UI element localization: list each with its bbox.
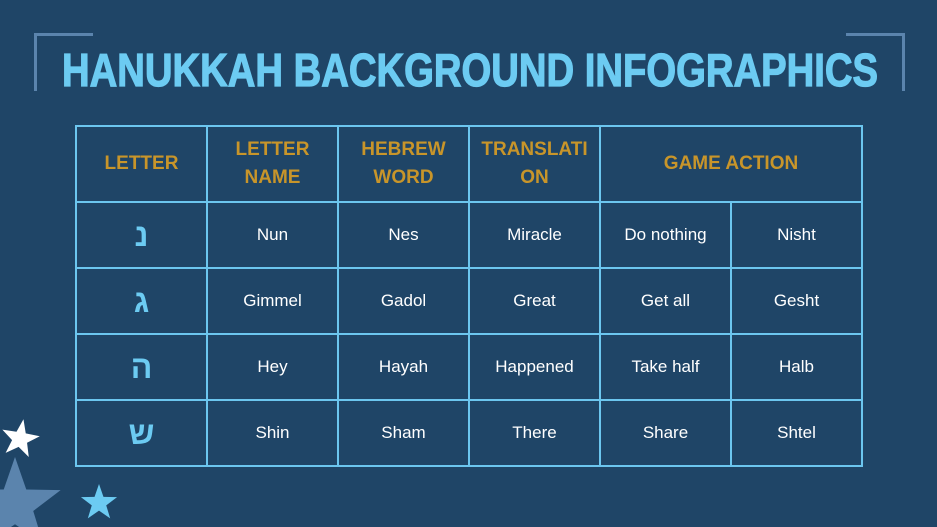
icon: big star: [0, 457, 61, 527]
table: LETTER: [236, 139, 309, 160]
table: Nun: [257, 225, 288, 244]
table: LETTER: [105, 153, 178, 174]
title bracket left: [34, 33, 93, 91]
table: Share: [643, 423, 688, 442]
table: ג: [134, 282, 149, 318]
table: Nes: [388, 225, 419, 244]
table: Miracle: [507, 225, 562, 244]
table: Gadol: [381, 291, 426, 310]
table: GAME ACTION: [664, 153, 798, 174]
title bracket right: [846, 33, 905, 91]
table: Shtel: [777, 423, 816, 442]
table: There: [512, 423, 557, 442]
table: NAME: [245, 167, 300, 188]
table: [75, 125, 863, 467]
table: Hayah: [379, 357, 428, 376]
table: TRANSLATI: [481, 139, 588, 160]
table: Do nothing: [624, 225, 707, 244]
table: Take half: [631, 357, 700, 376]
table: Hey: [257, 357, 288, 376]
table: ה: [131, 348, 152, 384]
table: Gimmel: [243, 291, 302, 310]
icon: blue star: [81, 484, 117, 518]
icon: white star: [0, 416, 42, 458]
table: Halb: [779, 357, 814, 376]
stars decoration: [0, 419, 117, 527]
table: ש: [129, 414, 154, 450]
table: Sham: [381, 423, 426, 442]
table: ON: [520, 167, 549, 188]
table: Get all: [641, 291, 690, 310]
table: Great: [513, 291, 556, 310]
table: Nisht: [777, 225, 816, 244]
table: WORD: [373, 167, 434, 188]
table: HEBREW: [361, 139, 446, 160]
table: Happened: [495, 357, 574, 376]
table: Shin: [255, 423, 290, 442]
table: Gesht: [774, 291, 819, 310]
table: נ: [135, 216, 148, 252]
